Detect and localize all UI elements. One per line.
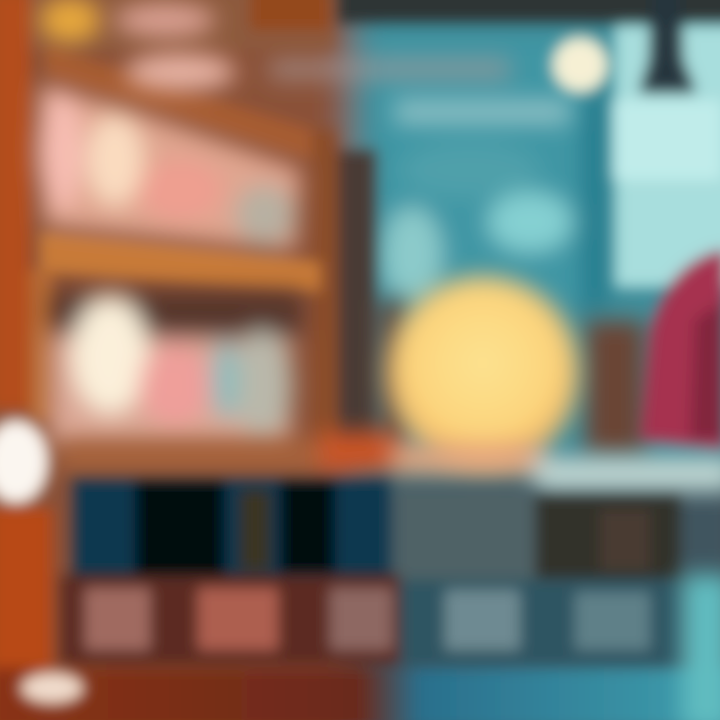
small white blob on floor xyxy=(20,672,84,704)
teal right edge xyxy=(682,575,720,720)
bookcase: shelves and uprights xyxy=(0,0,376,460)
white blob left xyxy=(0,420,48,504)
top dark ceiling strip xyxy=(335,0,720,24)
left lower pillar xyxy=(0,508,52,683)
glowing light blob xyxy=(552,37,608,93)
text-like smudges at top xyxy=(270,58,570,124)
lower cabinet panels xyxy=(60,575,680,665)
hanging lamp xyxy=(640,0,695,92)
lower shelf objects xyxy=(50,292,302,445)
brown wall behind sphere xyxy=(376,300,645,455)
table top xyxy=(60,432,720,490)
maroon armchair xyxy=(640,250,720,450)
grey cabinets right xyxy=(395,490,680,590)
teal wall xyxy=(378,40,606,310)
glowing yellow sphere xyxy=(388,277,578,467)
floor xyxy=(0,668,720,720)
light teal right window xyxy=(612,25,720,287)
dark navy cabinets xyxy=(72,478,390,583)
upper shelf books xyxy=(38,0,300,250)
